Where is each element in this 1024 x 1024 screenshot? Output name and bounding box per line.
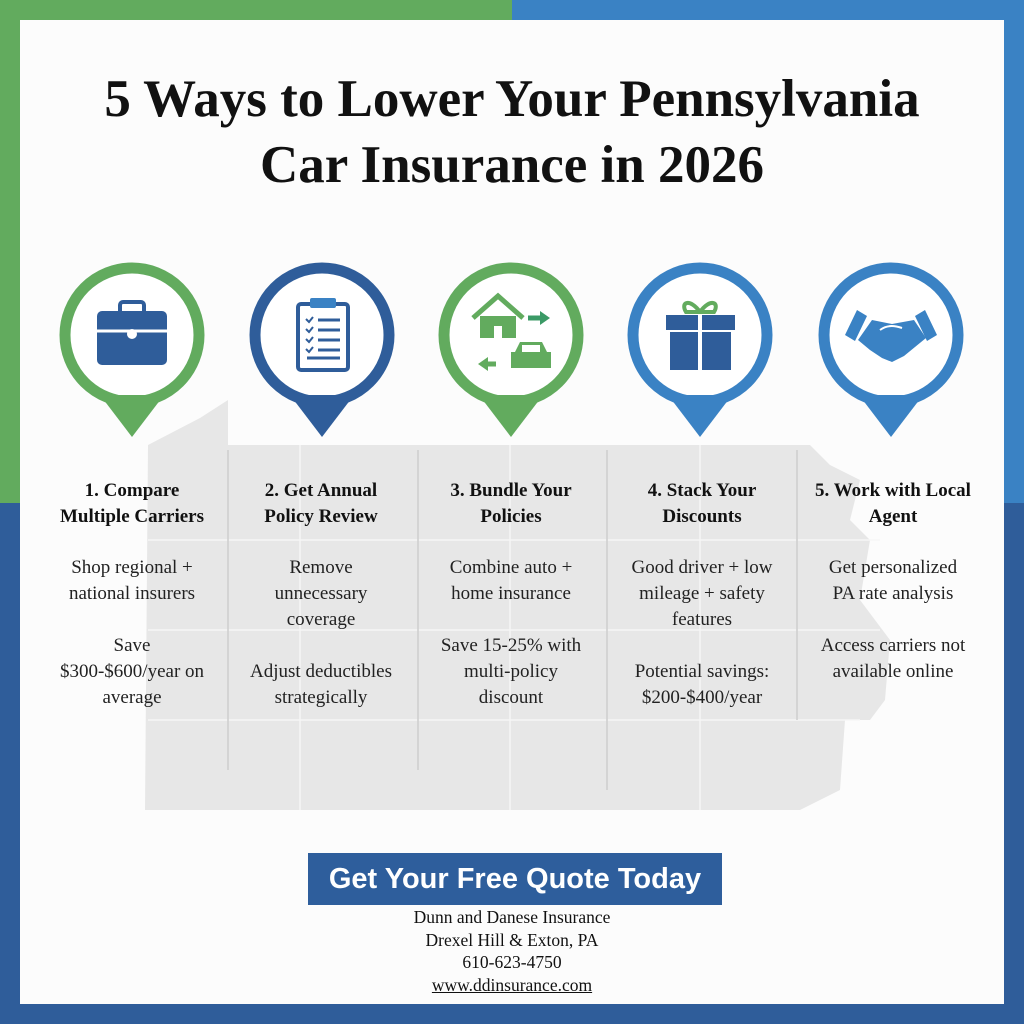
- column 3: 3. Bundle Your: [450, 480, 572, 501]
- column 5: Get personalized: [829, 557, 957, 578]
- column 4: Discounts: [662, 506, 742, 527]
- column 1: average: [102, 687, 162, 708]
- column 2: coverage: [287, 609, 355, 630]
- pin 3: house and car: [444, 268, 578, 437]
- footer contact: [414, 907, 610, 995]
- column 4: Good driver + low: [631, 557, 773, 578]
- column 1: 1. Compare: [85, 480, 179, 501]
- column 2: 2. Get Annual: [265, 480, 377, 501]
- column 1: Multiple Carriers: [60, 506, 204, 527]
- footer contact: Dunn and Danese Insurance: [414, 907, 610, 927]
- column 1: [60, 480, 204, 708]
- column 2: Policy Review: [264, 506, 378, 527]
- column 5: Access carriers not: [821, 635, 965, 656]
- pin 5: handshake: [824, 268, 958, 437]
- column 3: Save 15-25% with: [441, 635, 581, 656]
- pin 4: gift: [633, 268, 767, 437]
- column 5: Agent: [869, 506, 917, 527]
- pin 1: briefcase: [65, 268, 199, 437]
- pins: [60, 262, 964, 437]
- column 5: [815, 480, 971, 682]
- column 4: [631, 480, 773, 708]
- column 2: Adjust deductibles: [250, 661, 392, 682]
- column 1: national insurers: [69, 583, 195, 604]
- column 2: [250, 480, 392, 708]
- column 5: PA rate analysis: [833, 583, 953, 604]
- column 2: unnecessary: [275, 583, 367, 604]
- column 1: Shop regional +: [71, 557, 193, 578]
- CTA button: [308, 853, 722, 905]
- column 4: 4. Stack Your: [648, 480, 756, 501]
- footer contact: Drexel Hill & Exton, PA: [426, 930, 598, 950]
- column 1: Save: [114, 635, 150, 656]
- column 3: discount: [479, 687, 543, 708]
- column 4: mileage + safety: [639, 583, 765, 604]
- column 3: Policies: [480, 506, 542, 527]
- pin 2: clipboard: [255, 268, 389, 437]
- column 3: Combine auto +: [450, 557, 572, 578]
- column 2: strategically: [275, 687, 367, 708]
- footer contact: 610-623-4750: [462, 952, 562, 972]
- column 4: features: [672, 609, 732, 630]
- column 4: $200-$400/year: [642, 687, 762, 708]
- CTA button: Get Your Free Quote Today: [329, 863, 701, 895]
- column 3: multi-policy: [464, 661, 558, 682]
- column 3: [441, 480, 581, 708]
- title: Car Insurance in 2026: [260, 136, 764, 194]
- title: 5 Ways to Lower Your Pennsylvania: [104, 70, 920, 128]
- column 1: $300-$600/year on: [60, 661, 204, 682]
- column 4: Potential savings:: [635, 661, 769, 682]
- footer contact: www.ddinsurance.com: [432, 975, 592, 995]
- column 2: Remove: [289, 557, 353, 578]
- column 5: available online: [833, 661, 953, 682]
- column 3: home insurance: [451, 583, 571, 604]
- title: [104, 70, 920, 194]
- column 5: 5. Work with Local: [815, 480, 971, 501]
